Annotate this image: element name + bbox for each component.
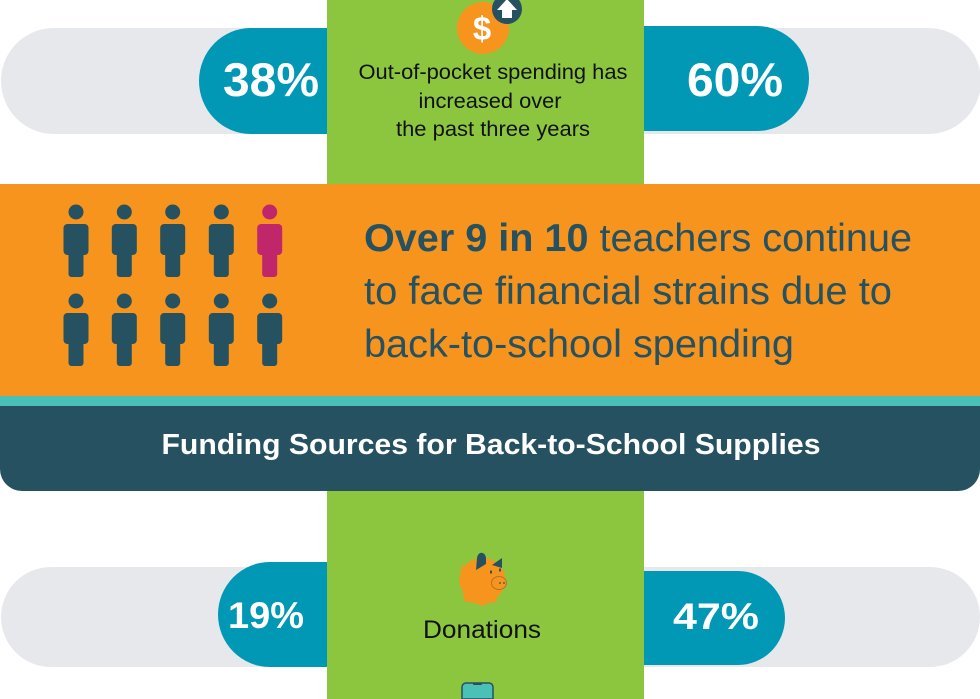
bottom row: right stat 47%: 47% bbox=[673, 596, 759, 637]
bottom row: left stat 19%: 19% bbox=[228, 595, 304, 636]
top row: right stat 60% bbox=[635, 26, 809, 131]
section heading: funding sources: Funding Sources for Back-to-School Supplies bbox=[162, 429, 820, 461]
teal divider band bbox=[0, 396, 980, 406]
headline: over 9 in 10 teachers: to face financial strains due to bbox=[364, 270, 892, 313]
text: out-of-pocket spending: the past three years bbox=[396, 118, 590, 141]
headline: over 9 in 10 teachers: back-to-school spending bbox=[364, 323, 794, 366]
icon: piggy bank bbox=[460, 553, 506, 606]
text: donations: Donations bbox=[423, 616, 541, 644]
icon: smartphone bbox=[462, 683, 493, 699]
top row: right stat 60%: 60% bbox=[687, 53, 783, 106]
bottom row: left stat 19% bbox=[218, 562, 327, 667]
icon: dollar coin with up arrow bbox=[457, 0, 522, 54]
text: out-of-pocket spending bbox=[358, 61, 628, 141]
bottom row: left gray bar bbox=[1, 567, 327, 667]
headline: over 9 in 10 teachers bbox=[364, 217, 912, 366]
bottom green panel bbox=[327, 480, 644, 699]
text: out-of-pocket spending: Out-of-pocket spending has bbox=[358, 61, 628, 84]
headline: over 9 in 10 teachers: Over 9 in 10 teachers continue bbox=[364, 217, 912, 260]
icon: dollar coin with up arrow: $ bbox=[473, 10, 491, 47]
orange panel bbox=[0, 184, 980, 396]
pictogram: 9 in 10 teachers bbox=[64, 204, 282, 366]
text: out-of-pocket spending: increased over bbox=[418, 90, 562, 113]
top row: left stat 38% bbox=[199, 28, 335, 134]
top row: right gray bar bbox=[630, 28, 980, 134]
bottom row: right stat 47% bbox=[644, 571, 785, 665]
section heading: funding sources bbox=[0, 406, 980, 491]
bottom row: right gray bar bbox=[644, 567, 980, 667]
top row: left stat 38%: 38% bbox=[223, 53, 319, 106]
top row: left gray bar bbox=[1, 28, 340, 134]
top green panel bbox=[327, 0, 644, 184]
